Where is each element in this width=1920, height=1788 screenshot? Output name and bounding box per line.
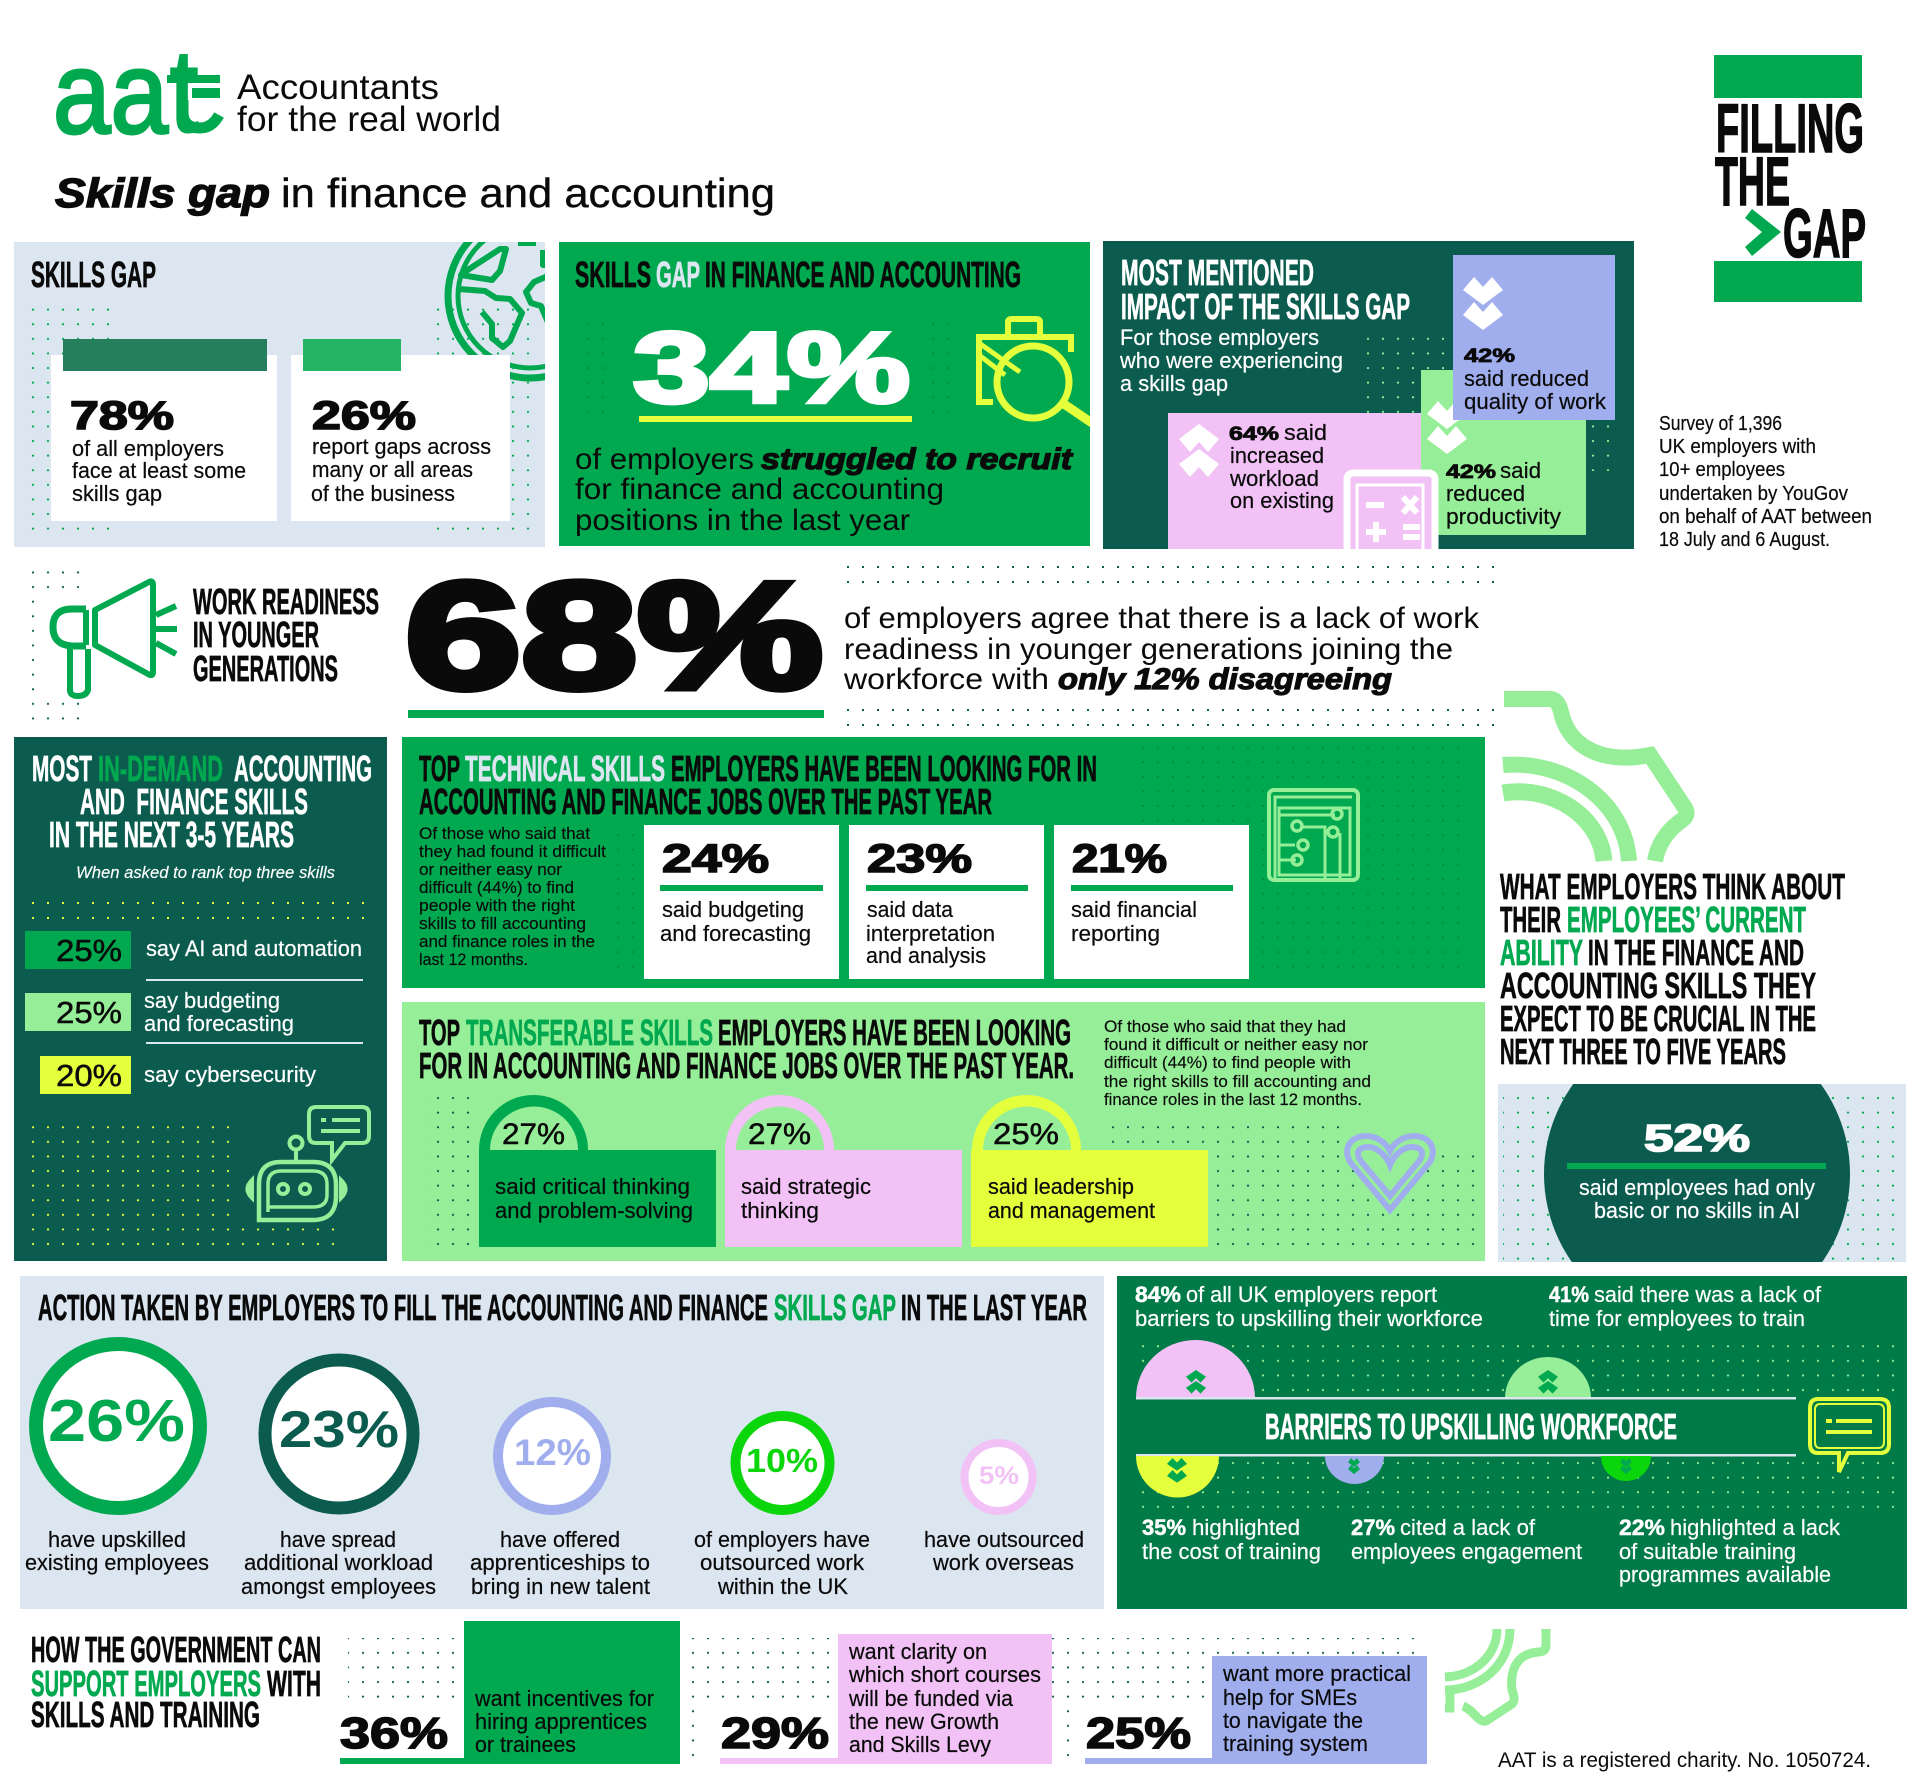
top text: 41%: time for employees to train (1549, 1306, 1805, 1331)
circle: 12%: apprenticeships to (470, 1550, 650, 1575)
heading: IN YOUNGER (193, 614, 319, 655)
logo strapline: Accountants (237, 68, 439, 107)
card: 42% reduced quality of work (1453, 255, 1615, 420)
top text: 41%: said there was a lack of (1594, 1282, 1822, 1307)
panel: skills gap (14, 242, 545, 547)
item: cybersecurity (40, 1056, 316, 1094)
card: strategic thinking (725, 1095, 962, 1247)
heading: what employers think: THEIR (1500, 899, 1561, 940)
heading: AND FINANCE SKILLS (80, 781, 308, 822)
intro text: who were experiencing (1119, 348, 1343, 373)
section: work readiness (22, 551, 1505, 725)
card: 24%: said budgeting (662, 897, 804, 922)
circle: 5% (924, 1443, 1084, 1575)
logo strapline: for the real world (237, 100, 501, 139)
card: 78%: skills gap (72, 481, 162, 506)
survey note: 18 July and 6 August. (1659, 529, 1830, 551)
text block: struggled to recruit (761, 443, 1074, 476)
logo strapline (237, 68, 501, 139)
government item: 25%: training system (1223, 1731, 1368, 1756)
heading: how the government can support: WITH (267, 1663, 321, 1704)
card: critical thinking: and problem-solving (495, 1198, 693, 1223)
heading: SKILLS GAP (774, 1287, 896, 1328)
dome: green up (1505, 1357, 1591, 1398)
government item: 25%: 25% (1086, 1709, 1191, 1758)
bottom text: 35%: the cost of training (1142, 1539, 1321, 1564)
stat: 68%: 68% (405, 551, 823, 721)
card: 23%: and analysis (866, 943, 986, 968)
government item: 36%: want incentives for (474, 1686, 654, 1711)
icon: megaphone (53, 581, 177, 696)
government item: 25%: want more practical (1222, 1661, 1411, 1686)
intro text (1119, 325, 1343, 396)
bottom text: 35%: 35% (1142, 1515, 1186, 1540)
card: 42% reduced productivity: said (1500, 458, 1541, 483)
intro text: found it difficult or neither easy nor (1104, 1035, 1368, 1054)
card: 21%: 21% (1072, 837, 1167, 881)
logo: filling the gap (1714, 55, 1866, 302)
icon: circuit board (1269, 790, 1358, 880)
heading: SKILLS (575, 254, 651, 295)
heading: IN THE LAST YEAR (901, 1287, 1087, 1328)
intro text: skills to fill accounting (419, 914, 586, 933)
card: 78%: 78% (70, 394, 174, 438)
government item: 29%: and Skills Levy (849, 1732, 991, 1757)
text block: of employers agree that there is a lack of work (844, 602, 1480, 635)
intro text: difficult (44%) to find people with (1104, 1053, 1351, 1072)
circle: 12%: have offered (500, 1527, 620, 1552)
logo wordmark: aa (53, 27, 169, 158)
panel: 52% AI skills: 52% (1644, 1118, 1750, 1160)
circle: 23%: additional workload (244, 1550, 433, 1575)
heading: ACCOUNTING (234, 748, 372, 789)
main title: in finance and accounting (281, 170, 775, 216)
intro text: they had found it difficult (419, 842, 606, 861)
bottom text: 22% (1619, 1515, 1841, 1587)
heading (575, 254, 1021, 295)
bottom text: 35%: highlighted (1192, 1515, 1300, 1540)
heading: MOST (32, 748, 92, 789)
stat: 34%: 34% (633, 312, 910, 424)
text block: workforce with (843, 663, 1049, 696)
heading: TOP (419, 748, 460, 789)
bottom text: 27%: employees engagement (1351, 1539, 1582, 1564)
heading: IMPACT OF THE SKILLS GAP (1121, 286, 1410, 327)
card: 78% (51, 339, 277, 521)
icon: globe (444, 242, 545, 382)
card: 21%: reporting (1071, 921, 1160, 946)
icon: small gear (1445, 1629, 1546, 1721)
card: 26%: of the business (311, 481, 455, 506)
heading: ACCOUNTING AND FINANCE JOBS OVER THE PAST YEAR (419, 781, 992, 822)
card: 42% reduced productivity (1421, 370, 1586, 535)
heading: SKILLS GAP (31, 254, 156, 295)
card: 42% reduced quality of work: quality of work (1464, 389, 1607, 414)
card: critical thinking (479, 1095, 716, 1247)
circle: 12%: 12% (514, 1432, 591, 1473)
heading: how the government can support: HOW THE GOVERNMENT CAN (31, 1629, 321, 1670)
text block (843, 602, 1480, 696)
circle: 10%: of employers have (694, 1527, 870, 1552)
icon: briefcase and magnifier (979, 319, 1092, 423)
main title (55, 170, 775, 216)
icon: arrow (1745, 209, 1781, 256)
circle: 10%: outsourced work (700, 1550, 865, 1575)
card: strategic thinking: thinking (741, 1198, 819, 1223)
icon: speech bubble (1810, 1399, 1889, 1472)
icon: robot (248, 1107, 369, 1220)
government item: 36%: or trainees (475, 1732, 576, 1757)
heading (1121, 252, 1410, 327)
text block: for finance and accounting (575, 473, 944, 506)
intro text: and finance roles in the (419, 932, 595, 951)
heading: GAP (656, 254, 700, 295)
icon: heart (1347, 1136, 1433, 1210)
heading: how the government can support (31, 1629, 321, 1735)
bottom text: 22%: of suitable training (1619, 1539, 1796, 1564)
intro text: the right skills to fill accounting and (1104, 1072, 1371, 1091)
bottom text: 27%: cited a lack of (1400, 1515, 1536, 1540)
bottom text: 35% (1142, 1515, 1321, 1564)
card: 23%: said data (867, 897, 954, 922)
government item: 25% (1085, 1656, 1427, 1764)
card: 21%: said financial (1071, 897, 1197, 922)
top text: 84% (1135, 1282, 1483, 1331)
panel: 52% AI skills: said employees had only (1579, 1175, 1815, 1200)
text block (575, 443, 1074, 537)
panel: top transferable skills (402, 1002, 1485, 1261)
bottom text: 27%: 27% (1351, 1515, 1395, 1540)
item: AI and automation (25, 931, 362, 969)
government item: 29%: which short courses (848, 1662, 1041, 1687)
heading: MOST MENTIONED (1121, 252, 1314, 293)
logo wordmark: t (170, 25, 198, 156)
card: leadership and management: said leadership (988, 1174, 1134, 1199)
heading: WORK READINESS (193, 581, 379, 622)
text block: only 12% disagreeing (1058, 663, 1392, 696)
government item: 36%: 36% (340, 1709, 448, 1758)
circle: 5%: work overseas (932, 1550, 1074, 1575)
top text: 84%: barriers to upskilling their workforce (1135, 1306, 1483, 1331)
heading (419, 748, 1097, 822)
top text: 84%: 84% (1135, 1282, 1181, 1307)
circle: 10%: within the UK (717, 1574, 848, 1599)
charity note: AAT is a registered charity. No. 1050724. (1498, 1749, 1871, 1772)
circle: 10% (694, 1416, 870, 1599)
heading: IN THE NEXT 3-5 YEARS (49, 814, 294, 855)
subheading: When asked to rank top three skills (76, 863, 335, 882)
card: 42% reduced productivity: productivity (1446, 504, 1561, 529)
heading (193, 581, 379, 689)
text block: readiness in younger generations joining the (844, 633, 1453, 666)
heading: IN FINANCE AND ACCOUNTING (705, 254, 1021, 295)
card: 23%: interpretation (866, 921, 995, 946)
circle: 23%: 23% (279, 1401, 399, 1459)
intro text: a skills gap (1120, 371, 1228, 396)
top text: 41% (1549, 1282, 1822, 1331)
card: 23%: 23% (867, 837, 972, 881)
panel: top technical skills (402, 737, 1485, 988)
card: 21% (1054, 825, 1249, 979)
item: budgeting and forecasting: say budgeting (144, 988, 280, 1013)
card: 78%: face at least some (72, 458, 246, 483)
intro text: Of those who said that (419, 824, 590, 843)
item: AI and automation: 25% (56, 933, 122, 968)
card: leadership and management: and management (988, 1198, 1155, 1223)
survey note: on behalf of AAT between (1659, 506, 1872, 528)
card: 24%: 24% (662, 837, 769, 881)
card: 24% (644, 825, 839, 979)
government item: 36% (340, 1621, 680, 1764)
card: 64% increased workload: increased (1230, 443, 1324, 468)
panel: 52% AI skills (1498, 1084, 1906, 1262)
heading: TOP (419, 1012, 460, 1053)
panel: most in-demand skills (14, 737, 387, 1261)
heading: TRANSFERABLE SKILLS (466, 1012, 713, 1053)
dome: yellow down (1136, 1456, 1219, 1497)
heading: GENERATIONS (193, 648, 338, 689)
card: 42% reduced productivity: reduced (1446, 481, 1525, 506)
icon: large gear (1503, 699, 1686, 861)
icon: calculator (1347, 473, 1435, 563)
government item: 25%: help for SMEs (1223, 1685, 1357, 1710)
heading: what employers think: ABILITY (1500, 932, 1583, 973)
heading: how the government can support: SKILLS AND TRAINING (31, 1694, 260, 1735)
intro text: last 12 months. (419, 950, 528, 969)
card: strategic thinking: 27% (748, 1118, 811, 1151)
dome: blue down (1325, 1456, 1384, 1484)
heading: how the government can support: SUPPORT EMPLOYERS (31, 1663, 261, 1704)
card: 42% reduced productivity: 42% (1446, 462, 1496, 483)
heading: EMPLOYERS HAVE BEEN LOOKING (718, 1012, 1071, 1053)
text block: positions in the last year (575, 504, 910, 537)
intro text (419, 824, 606, 969)
top text: 41%: 41% (1549, 1282, 1589, 1307)
survey note: 10+ employees (1659, 459, 1785, 481)
circle: 10%: 10% (746, 1442, 818, 1479)
circle: 26%: existing employees (25, 1550, 209, 1575)
card: 26% (291, 339, 510, 521)
heading: EMPLOYERS HAVE BEEN LOOKING FOR IN (671, 748, 1097, 789)
card: 64% increased workload: on existing (1230, 488, 1334, 513)
item: budgeting and forecasting (25, 988, 294, 1036)
heading: IN-DEMAND (98, 748, 223, 789)
circle: 23% (241, 1360, 436, 1599)
card: 26%: report gaps across (312, 434, 491, 459)
government item: 29%: the new Growth (849, 1709, 999, 1734)
card: 78%: of all employers (72, 436, 224, 461)
card: 42% reduced quality of work: 42% (1464, 346, 1515, 367)
item: budgeting and forecasting: 25% (56, 995, 122, 1030)
card: 23% (849, 825, 1044, 979)
heading (419, 1012, 1074, 1086)
government item: 29%: want clarity on (848, 1639, 987, 1664)
bottom text: 22%: highlighted a lack (1670, 1515, 1841, 1540)
bottom dot field (348, 1638, 1427, 1762)
circle: 26% (25, 1344, 209, 1575)
circle: 23%: amongst employees (241, 1574, 436, 1599)
logo: filling the gap: THE (1715, 143, 1790, 220)
panel: barriers to upskilling (1117, 1276, 1907, 1609)
item: cybersecurity: 20% (56, 1058, 122, 1093)
text block: of employers (575, 443, 754, 476)
card: critical thinking: said critical thinking (495, 1174, 690, 1199)
card: 24%: and forecasting (660, 921, 811, 946)
heading: ACTION TAKEN BY EMPLOYERS TO FILL THE ACCOUNTING AND FINANCE (38, 1287, 768, 1328)
intro text: people with the right (419, 896, 575, 915)
card: 64% increased workload: said (1284, 420, 1327, 445)
intro text: finance roles in the last 12 months. (1104, 1090, 1362, 1109)
circle: 5%: have outsourced (924, 1527, 1084, 1552)
intro text: Of those who said that they had (1104, 1017, 1346, 1036)
survey note: UK employers with (1659, 436, 1816, 458)
government item: 25%: to navigate the (1223, 1708, 1363, 1733)
government item: 29% (720, 1634, 1052, 1764)
card: 64% increased workload (1168, 413, 1421, 549)
bottom text: 22%: programmes available (1619, 1562, 1831, 1587)
card: 26%: many or all areas (312, 457, 473, 482)
card: leadership and management: 25% (993, 1118, 1059, 1151)
intro text: For those employers (1120, 325, 1319, 350)
circle: 26%: 26% (48, 1388, 185, 1454)
top text: 84%: of all UK employers report (1186, 1282, 1437, 1307)
intro text (1104, 1017, 1371, 1109)
circle: 12%: bring in new talent (471, 1574, 650, 1599)
circle: 5%: 5% (979, 1462, 1019, 1490)
card: 26%: 26% (312, 394, 416, 438)
heading (32, 748, 372, 855)
card: 64% increased workload: 64% (1229, 424, 1279, 445)
card: strategic thinking: said strategic (741, 1174, 871, 1199)
circle: 12% (470, 1402, 650, 1599)
card: 64% increased workload: workload (1229, 466, 1319, 491)
intro text: difficult (44%) to find (419, 878, 574, 897)
panel: skills gap in finance and accounting (559, 242, 1092, 546)
circle: 26%: have upskilled (48, 1527, 186, 1552)
bottom text: 22%: 22% (1619, 1515, 1665, 1540)
survey note: Survey of 1,396 (1659, 413, 1782, 435)
panel: action taken by employers (20, 1276, 1104, 1609)
survey note (1659, 413, 1872, 551)
survey note: undertaken by YouGov (1659, 483, 1848, 505)
card: 42% reduced quality of work: said reduced (1464, 366, 1589, 391)
heading: TECHNICAL SKILLS (465, 748, 665, 789)
heading: FOR IN ACCOUNTING AND FINANCE JOBS OVER THE PAST YEAR. (419, 1045, 1074, 1086)
dome: bright green down (1601, 1456, 1651, 1481)
bottom text: 27% (1351, 1515, 1582, 1564)
card: leadership and management (971, 1095, 1208, 1247)
panel: most mentioned impact (1103, 241, 1634, 563)
circle: 23%: have spread (280, 1527, 396, 1552)
item: AI and automation: say AI and automation (146, 936, 362, 961)
heading: what employers think (1500, 866, 1845, 1072)
panel: 52% AI skills: basic or no skills in AI (1594, 1198, 1800, 1223)
government item: 29%: will be funded via (848, 1686, 1014, 1711)
government item: 29%: 29% (721, 1709, 829, 1758)
dome: pink up (1136, 1340, 1255, 1398)
government item: 36%: hiring apprentices (475, 1709, 647, 1734)
item: budgeting and forecasting: and forecasting (144, 1011, 294, 1036)
logo: AAT (53, 25, 501, 158)
intro text: or neither easy nor (419, 860, 562, 879)
main title: Skills gap (55, 170, 270, 216)
card: critical thinking: 27% (502, 1118, 565, 1151)
item: cybersecurity: say cybersecurity (144, 1062, 316, 1087)
